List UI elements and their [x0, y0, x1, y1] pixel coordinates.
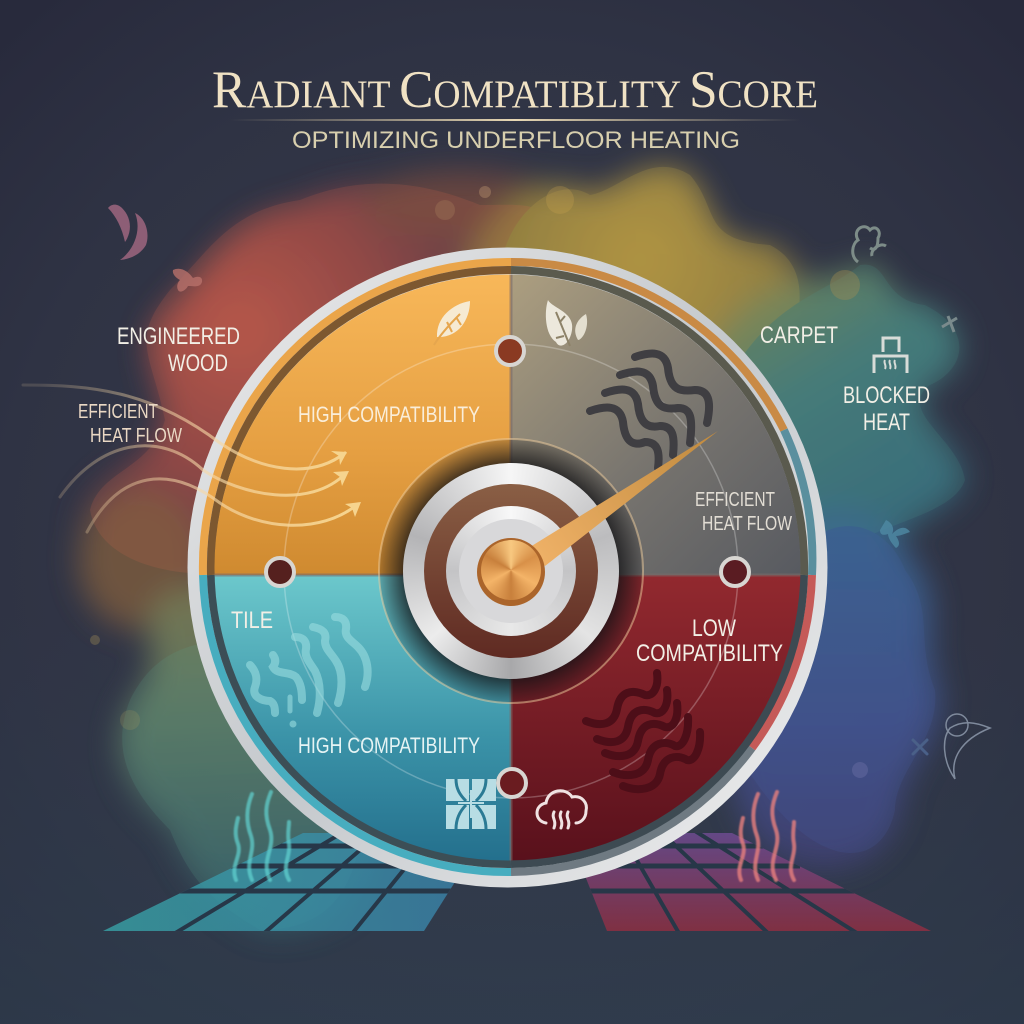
- hub shadow ring: [379, 439, 643, 703]
- label: high compatibility bottom: HIGH COMPATIBILITY: [298, 733, 480, 758]
- label: low compatibility: LOW: [692, 615, 736, 642]
- colored heat smoke blobs: [78, 167, 965, 931]
- floor tiles: red: [586, 833, 931, 931]
- label: blocked heat: BLOCKED: [843, 382, 930, 409]
- silver outer ring: [403, 463, 619, 679]
- brown ring: [424, 484, 598, 658]
- label: high compatibility top: HIGH COMPATIBILITY: [298, 402, 480, 427]
- icon: squiggle: [853, 227, 886, 262]
- label: efficient heat flow left: EFFICIENT: [78, 401, 158, 423]
- arrowheads: [331, 451, 361, 517]
- inner silver ring: [446, 506, 576, 636]
- label: blocked heat: [843, 382, 930, 436]
- dark inner ring: [211, 270, 804, 864]
- icon: double leaf: [546, 300, 587, 346]
- colored rim band: [203, 262, 812, 872]
- floor tiles: teal: [103, 833, 454, 931]
- rising heat: red: [739, 792, 794, 880]
- copper cap: [477, 538, 545, 606]
- label: tile: TILE: [231, 607, 273, 634]
- title: RADIANT COMPATIBLITY SCORE: [212, 61, 818, 119]
- node markers: [266, 337, 749, 797]
- icon: steam cloud: [537, 791, 586, 828]
- icon: star: [942, 316, 957, 332]
- label: engineered wood: WOOD: [168, 350, 228, 377]
- tile waves: [250, 617, 368, 728]
- icon: cross: [913, 740, 927, 754]
- icon: butterfly: [173, 269, 202, 292]
- label: engineered wood: ENGINEERED: [117, 323, 240, 350]
- heat flow arrows: [23, 385, 361, 532]
- label: efficient heat flow right: EFFICIENT: [695, 489, 775, 511]
- central hub: [403, 431, 718, 679]
- label: efficient heat flow right: HEAT FLOW: [702, 513, 792, 535]
- label: carpet: CARPET: [760, 322, 838, 349]
- quadrant: tile: [200, 575, 511, 870]
- gauge dial: [188, 248, 831, 888]
- low compatibility waves: [586, 673, 700, 789]
- icon: moon outline: [945, 714, 990, 779]
- carpet waves: [590, 354, 709, 468]
- label: efficient heat flow right: [695, 489, 792, 535]
- dial rim: [188, 248, 828, 888]
- needle: [530, 431, 718, 566]
- label: blocked heat: HEAT: [863, 409, 910, 436]
- icon: blocked heat: [874, 338, 907, 373]
- label: low compatibility: COMPATIBILITY: [636, 640, 783, 667]
- subtitle: OPTIMIZING UNDERFLOOR HEATING: [292, 127, 740, 154]
- rising heat: teal: [234, 792, 289, 880]
- label: low compatibility: [636, 615, 783, 667]
- label: engineered wood: [117, 323, 240, 377]
- title divider: [230, 119, 800, 121]
- icon: crescents: [108, 205, 148, 260]
- icon: butterfly right: [880, 520, 910, 548]
- label: efficient heat flow left: HEAT FLOW: [90, 425, 182, 447]
- decorative icons: [108, 205, 990, 779]
- label: efficient heat flow left: [78, 401, 182, 447]
- icon: tile pattern: [446, 779, 496, 829]
- quadrant: carpet: [511, 270, 821, 575]
- quadrants: [214, 274, 800, 860]
- icon: leaf: [434, 301, 470, 345]
- quadrant: low compatibility: [511, 575, 821, 870]
- quadrant: engineered wood: [200, 270, 511, 575]
